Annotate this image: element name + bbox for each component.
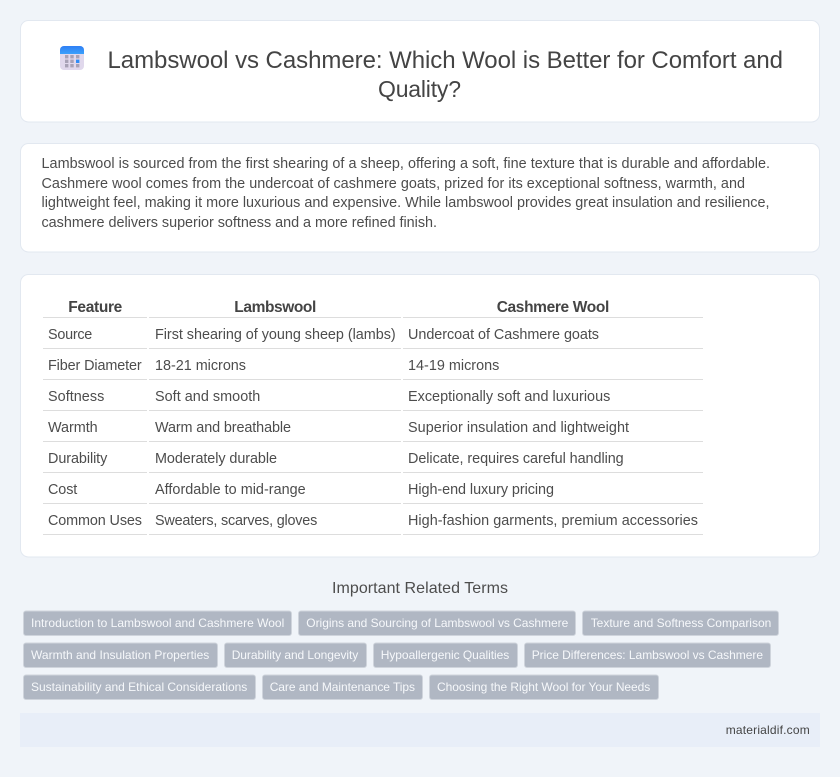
tag: price: [524, 643, 770, 668]
tag: hypoallergenic: Hypoallergenic Qualities: [381, 648, 509, 662]
table header row: Lambswool: [234, 299, 316, 316]
tag: choosing: Choosing the Right Wool for Your Needs: [437, 680, 650, 694]
table row: warmth: [43, 420, 703, 442]
tag: warmth: Warmth and Insulation Properties: [31, 648, 209, 662]
table row: fiber diameter: 14-19 microns: [408, 358, 499, 374]
table row: cost: Cost: [48, 482, 77, 498]
title: Lambswool vs Cashmere: Which Wool is Better for Comfort and: [108, 47, 783, 74]
panel: comparison table: [20, 274, 820, 557]
table row: common uses: Common Uses: [48, 513, 142, 529]
tag: care: Care and Maintenance Tips: [270, 680, 415, 694]
text block: introduction paragraph: Cashmere wool comes from the undercoat of cashmere goats, prized for its exceptional softness, warmth, and: [42, 176, 745, 192]
table row: fiber diameter: [43, 358, 703, 380]
table row: warmth: Warmth: [48, 420, 98, 436]
table row: softness: Softness: [48, 389, 104, 405]
tag: introduction: Introduction to Lambswool and Cashmere Wool: [31, 616, 284, 630]
footer: [20, 713, 820, 747]
table row: common uses: [43, 513, 703, 534]
table row: durability: Delicate, requires careful handling: [408, 451, 624, 467]
table header row: Cashmere Wool: [497, 299, 609, 316]
tag: durability: [224, 643, 366, 668]
table row: common uses: High-fashion garments, premium accessories: [408, 513, 698, 529]
footer: materialdif.com: [726, 723, 810, 737]
table row: source: First shearing of young sheep (lambs): [155, 327, 396, 343]
tag: origins: [298, 611, 576, 636]
tag: choosing: [430, 675, 658, 700]
table row: cost: Affordable to mid-range: [155, 482, 306, 498]
table row: durability: Durability: [48, 451, 108, 467]
panel: header: [20, 20, 820, 122]
table header row: [43, 299, 703, 318]
tag: sustainability: [24, 675, 256, 700]
table row: fiber diameter: 18-21 microns: [155, 358, 246, 374]
table row: source: Source: [48, 327, 92, 343]
panel: related term tags: [24, 611, 778, 700]
text block: introduction paragraph: cashmere delivers superior softness and a more refined finish.: [42, 215, 437, 231]
text block: introduction paragraph: Lambswool is sourced from the first shearing of a sheep, offering a soft, fine texture that is durable and affordable.: [42, 156, 770, 172]
table header row: Feature: [68, 299, 123, 316]
table row: softness: Soft and smooth: [155, 389, 260, 405]
tag: durability: Durability and Longevity: [232, 648, 358, 662]
text block: introduction paragraph: [42, 156, 770, 231]
tag: warmth: [24, 643, 218, 668]
tag: texture: [582, 611, 778, 636]
table row: common uses: Sweaters, scarves, gloves: [155, 513, 317, 529]
table row: durability: Moderately durable: [155, 451, 277, 467]
table row: softness: [43, 389, 703, 410]
title: Quality?: [378, 76, 461, 102]
tag: origins: Origins and Sourcing of Lambswool vs Cashmere: [306, 616, 569, 630]
table row: softness: Exceptionally soft and luxurious: [408, 389, 610, 405]
panel: introduction: [20, 144, 820, 252]
table row: source: [43, 327, 703, 348]
table row: cost: [43, 482, 703, 504]
tag: price: Price Differences: Lambswool vs Cashmere: [532, 648, 763, 662]
tag: hypoallergenic: [374, 643, 518, 668]
table row: durability: [43, 451, 703, 472]
table row: warmth: Superior insulation and lightweight: [408, 420, 629, 436]
text block: introduction paragraph: lightweight feel, making it more luxurious and expensive. While lambswool provides great insulation and resilience,: [42, 195, 770, 211]
tag: care: [262, 675, 422, 700]
tag: introduction: [24, 611, 292, 636]
table row: source: Undercoat of Cashmere goats: [408, 327, 599, 343]
tag: texture: Texture and Softness Comparison: [591, 616, 771, 630]
table row: cost: High-end luxury pricing: [408, 482, 554, 498]
title: [108, 47, 783, 102]
heading: important related terms: Important Related Terms: [332, 580, 508, 597]
table row: warmth: Warm and breathable: [155, 420, 291, 436]
icon: calendar: [60, 46, 84, 70]
tag: sustainability: Sustainability and Ethical Considerations: [31, 680, 247, 694]
table row: fiber diameter: Fiber Diameter: [48, 358, 142, 374]
